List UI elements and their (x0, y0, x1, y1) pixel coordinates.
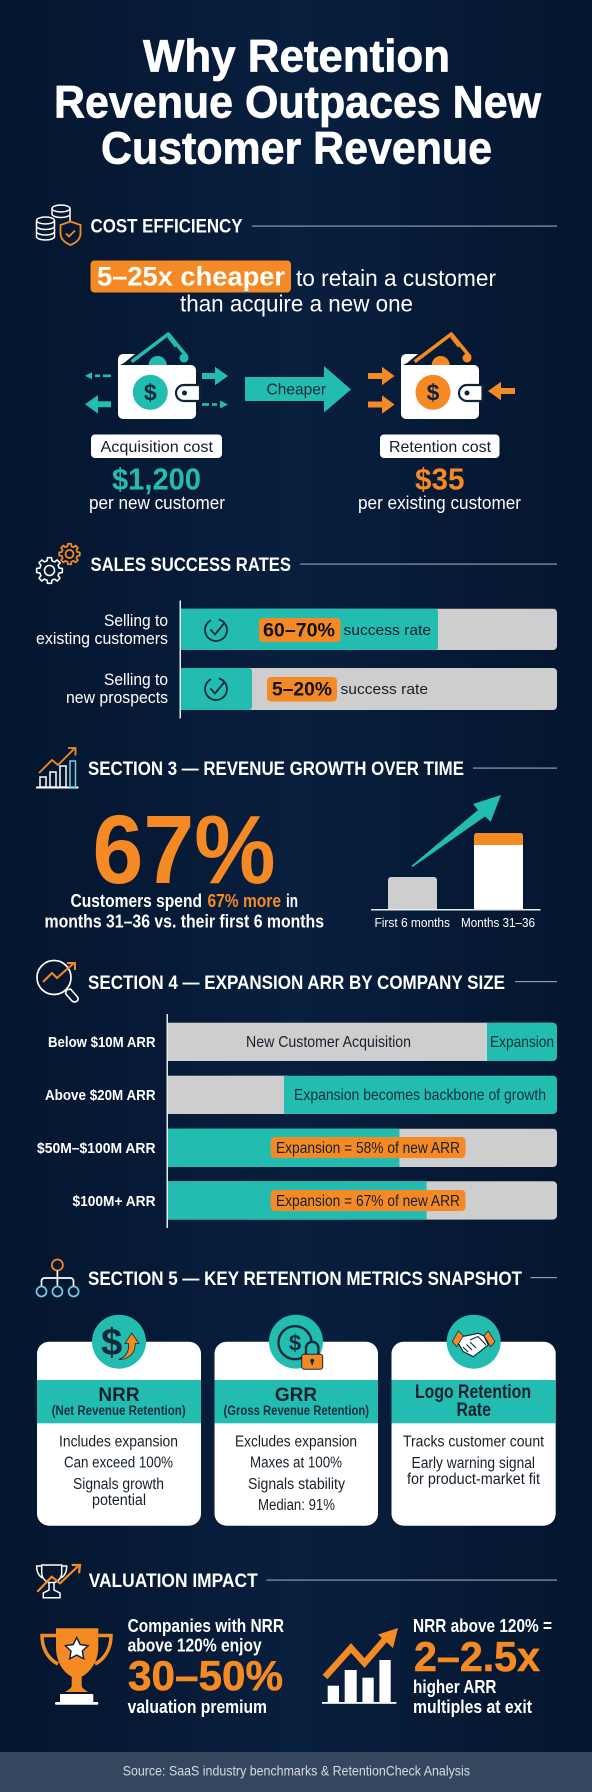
callout: 5-25x cheaper (90, 260, 496, 316)
row: existing customers: success rate (344, 622, 431, 639)
heading: key retention metrics: SECTION 5 — KEY RETENTION METRICS SNAPSHOT (88, 1269, 522, 1290)
chart: spend bars: First 6 months (374, 915, 450, 930)
card: NRR: NRR (98, 1385, 140, 1406)
footer: source: Source: SaaS industry benchmarks & RetentionCheck Analysis (123, 1762, 470, 1778)
text: ARR multiples: 2–2.5x (414, 1633, 541, 1680)
arrow: cheaper: Cheaper (266, 382, 327, 398)
text: customers spend more: months 31–36 vs. their first 6 months (44, 912, 324, 932)
text: valuation premium: valuation premium (128, 1697, 267, 1717)
chart: spend bars: Months 31–36 (461, 915, 535, 930)
card: NRR (37, 1315, 201, 1526)
row: above $20M ARR: Above $20M ARR (45, 1087, 156, 1104)
icon: retention wallet with arrows (368, 334, 515, 419)
text: valuation premium (128, 1616, 284, 1717)
card: NRR: potential (92, 1492, 146, 1509)
row: $50M-$100M ARR: $50M–$100M ARR (37, 1140, 156, 1157)
text: customers spend more: 67% more (208, 891, 281, 911)
icon: acquisition wallet with arrows (85, 334, 228, 419)
row: existing customers: Selling to (104, 612, 168, 630)
text: ARR multiples: NRR above 120% = (413, 1616, 552, 1636)
icon: magnifier chart (37, 960, 78, 1002)
card: GRR: Median: 91% (258, 1497, 335, 1514)
heading: cost efficiency: COST EFFICIENCY (90, 216, 243, 238)
panel: valuation impact (37, 1565, 557, 1717)
callout: 5-25x cheaper: to retain a customer (296, 265, 496, 291)
row: $100M+ ARR (72, 1181, 557, 1220)
row: existing customers: 60–70% (263, 621, 335, 642)
card: logo retention rate: Early warning signal (412, 1455, 535, 1472)
card: logo retention rate: Logo Retention (415, 1382, 531, 1403)
text: ARR multiples (413, 1616, 552, 1717)
row: $50M-$100M ARR: Expansion = 58% of new ARR (276, 1140, 460, 1157)
title: Revenue Outpaces New (54, 76, 542, 128)
panel: cost efficiency (36, 205, 557, 513)
row: above $20M ARR (45, 1076, 557, 1114)
card: logo retention rate (392, 1315, 556, 1526)
heading: expansion ARR: SECTION 4 — EXPANSION ARR BY COMPANY SIZE (88, 973, 505, 994)
icon: coins and shield (36, 205, 80, 245)
icon: acquisition wallet with arrows: $ (144, 380, 157, 406)
callout: 5-25x cheaper: than acquire a new one (180, 290, 413, 316)
text: customers spend more (44, 891, 324, 932)
card: logo retention rate: Rate (456, 1400, 491, 1421)
panel: revenue growth over time (36, 748, 557, 932)
text: ARR multiples: higher ARR (413, 1677, 496, 1697)
arrow: growth (411, 795, 501, 867)
heading: sales success rates: SALES SUCCESS RATES (90, 555, 291, 576)
row: existing customers (36, 609, 557, 650)
text: valuation premium: 30–50% (128, 1652, 283, 1699)
row: new prospects: new prospects (66, 689, 168, 707)
row: below $10M ARR (48, 1023, 557, 1061)
heading: revenue growth over time: SECTION 3 — REVENUE GROWTH OVER TIME (88, 759, 464, 780)
card: GRR: Signals stability (248, 1476, 345, 1493)
label: acquisition cost (91, 434, 222, 458)
icon: handshake (452, 1331, 495, 1357)
text: customers spend more: Customers spend (70, 891, 202, 911)
card: GRR: Maxes at 100% (250, 1454, 342, 1472)
icon: gears (37, 544, 80, 583)
title: Why Retention (143, 30, 450, 82)
row: new prospects: 5–20% (272, 680, 332, 701)
card: NRR: (Net Revenue Retention) (52, 1403, 186, 1418)
icon: dollar with up arrow: $ (101, 1322, 122, 1364)
icon: dollar coin with lock (278, 1326, 323, 1369)
icon: rising bar chart (322, 1628, 398, 1704)
card: NRR: Signals growth (73, 1476, 164, 1493)
stat: 67%: 67% (92, 795, 276, 904)
row: new prospects: success rate (340, 681, 428, 698)
row: new prospects (66, 668, 557, 710)
panel: expansion ARR by company size (37, 960, 557, 1228)
row: $50M-$100M ARR (37, 1129, 557, 1167)
row: $100M+ ARR: Expansion = 67% of new ARR (276, 1193, 460, 1210)
row: existing customers: existing customers (36, 630, 168, 648)
stat: retention cost: $35 (415, 462, 464, 496)
heading: valuation impact: VALUATION IMPACT (89, 1571, 258, 1592)
icon: trophy (42, 1628, 111, 1705)
row: new prospects: Selling to (104, 671, 168, 689)
stat: acquisition cost: $1,200 (112, 462, 201, 496)
card: NRR: Can exceed 100% (64, 1454, 173, 1472)
stat: retention cost: per existing customer (358, 493, 521, 513)
card: logo retention rate: Tracks customer count (403, 1434, 545, 1450)
row: above $20M ARR: Expansion becomes backbone of growth (294, 1087, 546, 1104)
text: valuation premium: above 120% enjoy (128, 1636, 262, 1656)
panel: key retention metrics snapshot (36, 1260, 557, 1526)
row: below $10M ARR: Below $10M ARR (48, 1034, 156, 1051)
icon: retention wallet with arrows: $ (427, 380, 440, 406)
label: retention cost: Retention cost (389, 439, 492, 456)
card: NRR: Includes expansion (59, 1434, 178, 1450)
icon: growth chart (36, 748, 78, 788)
row: below $10M ARR: Expansion (490, 1034, 554, 1051)
row: below $10M ARR: New Customer Acquisition (246, 1034, 411, 1051)
icon: dollar coin with lock: $ (289, 1330, 301, 1356)
card: GRR: Excludes expansion (235, 1434, 357, 1450)
title (54, 30, 542, 174)
card: GRR: GRR (275, 1385, 317, 1406)
icon: org tree (36, 1260, 79, 1296)
panel: sales success rates (36, 544, 557, 718)
row: $100M+ ARR: $100M+ ARR (72, 1193, 156, 1210)
card: GRR: (Gross Revenue Retention) (224, 1403, 369, 1418)
callout: 5-25x cheaper: 5–25x cheaper (97, 262, 285, 292)
text: customers spend more: in (286, 891, 298, 911)
arrow: cheaper (245, 366, 351, 412)
icon: trophy with arrow (37, 1565, 80, 1598)
card: logo retention rate: for product-market fit (407, 1471, 541, 1488)
footer: source (0, 1752, 592, 1792)
label: retention cost (380, 434, 500, 458)
stat: acquisition cost: per new customer (89, 493, 225, 513)
stat: retention cost (358, 462, 521, 513)
icon: dollar with up arrow (101, 1322, 139, 1364)
chart: spend bars (371, 795, 540, 930)
stat: acquisition cost (89, 462, 225, 513)
text: valuation premium: Companies with NRR (128, 1616, 284, 1636)
text: ARR multiples: multiples at exit (413, 1697, 532, 1717)
label: acquisition cost: Acquisition cost (100, 439, 214, 456)
title: Customer Revenue (101, 122, 492, 174)
card: GRR (214, 1315, 378, 1526)
